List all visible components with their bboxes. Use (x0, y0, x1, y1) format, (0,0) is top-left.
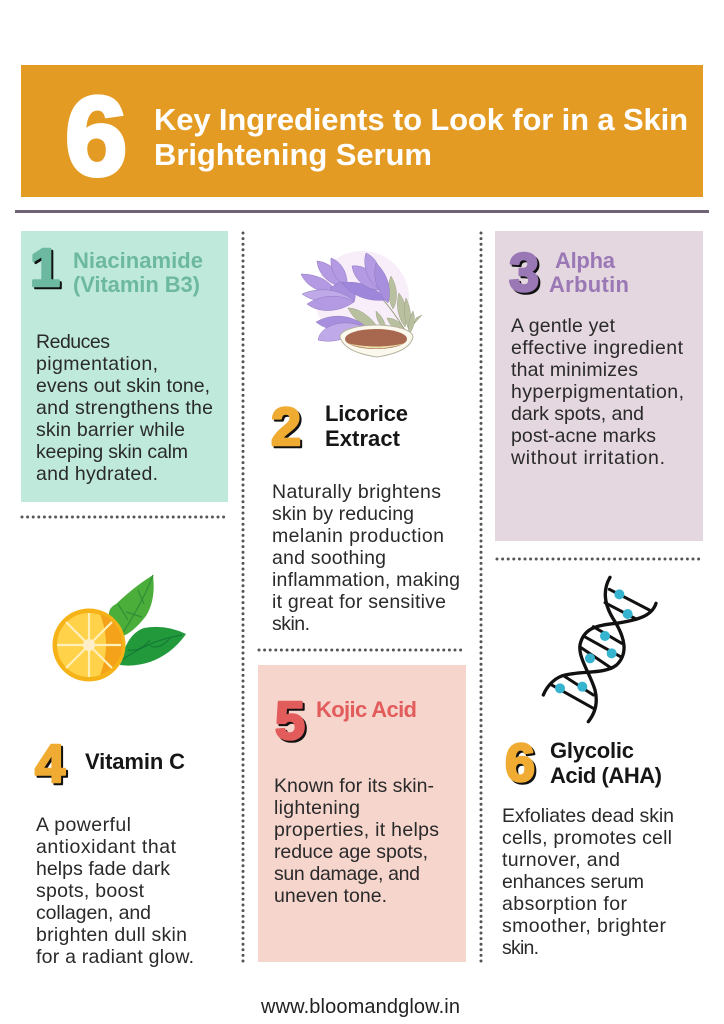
title: Brightening Serum (154, 137, 432, 172)
body text: effective ingredient (511, 337, 684, 359)
body text: helps fade dark (36, 858, 170, 880)
body text (274, 775, 439, 907)
body text (502, 805, 674, 959)
big number 6: 6 (65, 74, 127, 199)
body text: smoother, brighter (502, 915, 666, 937)
heading: alpha arbutin: Arbutin (549, 272, 629, 297)
body text: evens out skin tone, (36, 375, 210, 397)
body text: dark spots, and (511, 403, 644, 425)
heading: niacinamide (73, 248, 203, 297)
body text: Exfoliates dead skin (502, 805, 674, 827)
body text: collagen, and (36, 902, 151, 924)
body text: antioxidant that (36, 836, 177, 858)
number 3: 3 (509, 243, 539, 303)
body text: Known for its skin- (274, 775, 434, 797)
number 6: 6 (505, 733, 535, 793)
heading: alpha arbutin (549, 248, 629, 297)
icon: orange slice and leaves (52, 575, 186, 682)
body text (36, 331, 213, 485)
body text: and soothing (272, 547, 386, 569)
footer url: www.bloomandglow.in (260, 996, 460, 1018)
body text: skin barrier while (36, 419, 185, 441)
number 2: 2 (271, 397, 301, 457)
body text: that minimizes (511, 359, 638, 381)
body text: pigmentation, (36, 353, 158, 375)
body text: and strengthens the (36, 397, 213, 419)
body text: Reduces (36, 331, 110, 353)
body text: turnover, and (502, 849, 620, 871)
heading: niacinamide: Niacinamide (73, 248, 203, 273)
body text: reduce age spots, (274, 841, 428, 863)
panel: glycolic acid (502, 577, 674, 959)
panel: vitamin c (35, 575, 194, 968)
body text: hyperpigmentation, (511, 381, 684, 403)
body text: and hydrated. (36, 463, 158, 485)
panel: alpha arbutin (495, 231, 703, 541)
body text: enhances serum (502, 871, 644, 893)
body text: keeping skin calm (36, 441, 188, 463)
header banner (21, 65, 703, 199)
heading: niacinamide: (Vitamin B3) (73, 272, 200, 297)
body text: for a radiant glow. (36, 946, 194, 968)
body text (36, 814, 194, 968)
heading: glycolic acid: Glycolic (550, 738, 634, 763)
body text: absorption for (502, 893, 628, 915)
body text: A gentle yet (511, 315, 616, 337)
body text: Naturally brightens (272, 481, 441, 503)
body text: skin. (502, 937, 539, 959)
number 5: 5 (275, 691, 305, 751)
heading: glycolic acid: Acid (AHA) (550, 763, 662, 788)
panel: kojic acid (258, 665, 466, 962)
title: Key Ingredients to Look for in a Skin (154, 102, 688, 137)
heading: glycolic acid (550, 738, 662, 788)
title (154, 102, 688, 172)
body text: post-acne marks (511, 425, 656, 447)
heading: licorice extract (325, 401, 408, 451)
icon: licorice flowers and bowl (301, 251, 422, 357)
body text: skin by reducing (272, 503, 414, 525)
body text: spots, boost (36, 880, 145, 902)
body text (272, 481, 460, 635)
body text: sun damage, and (274, 863, 420, 885)
body text: without irritation. (510, 447, 665, 469)
body text: brighten dull skin (36, 924, 187, 946)
body text: A powerful (36, 814, 131, 836)
body text: cells, promotes cell (502, 827, 672, 849)
heading: licorice extract: Licorice (325, 401, 408, 426)
panel: niacinamide (21, 231, 228, 502)
number 1: 1 (30, 238, 60, 298)
heading: alpha arbutin: Alpha (555, 248, 616, 273)
body text: inflammation, making (272, 569, 460, 591)
body text: skin. (272, 613, 310, 635)
heading: kojic acid: Kojic Acid (316, 697, 417, 722)
heading: vitamin c: Vitamin C (85, 749, 185, 774)
body text: properties, it helps (274, 819, 439, 841)
heading: licorice extract: Extract (325, 426, 401, 451)
panel: licorice extract (271, 251, 460, 635)
body text: it great for sensitive (272, 591, 446, 613)
number 4: 4 (35, 734, 65, 794)
body text: uneven tone. (274, 885, 387, 907)
icon: dna helix (543, 577, 656, 722)
body text: melanin production (272, 525, 444, 547)
body text: lightening (274, 797, 360, 819)
body text (510, 315, 684, 469)
